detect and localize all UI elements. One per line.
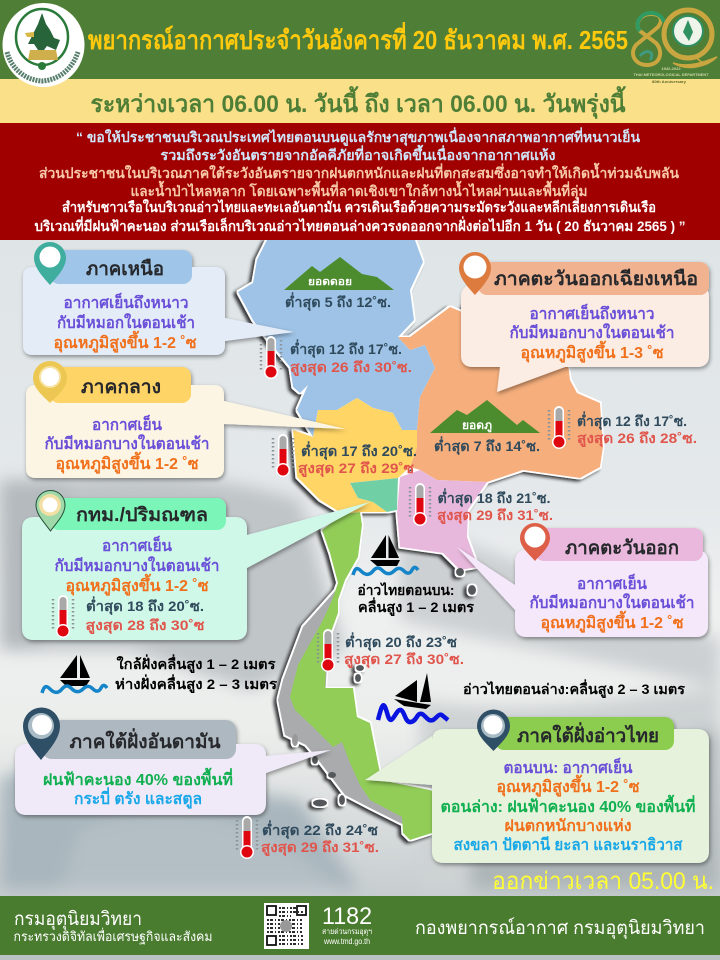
warning panel: [0, 123, 720, 240]
issue time: ออกข่าวเวลา 05.00 น.: [492, 868, 714, 895]
region: northeast: [398, 300, 603, 482]
time range band: ระหว่างเวลา 06.00 น. วันนี้ ถึง เวลา 06.00 น. วันพรุ่งนี้: [90, 85, 627, 120]
department name: กรมอุตุนิยมวิทยา: [14, 909, 142, 931]
temperatures: north: สูงสุด 26 ถึง 30˚ซ.: [290, 359, 412, 376]
logo: 80th anniversary: THAI METEOROLOGICAL DEPARTMENT: [634, 72, 709, 77]
description: [43, 767, 233, 810]
Andaman coast grey land: [278, 590, 405, 824]
temperatures: north: [261, 336, 412, 379]
description: ฝนฟ้าคะนอง 40% ของพื้นที่: [43, 767, 233, 789]
heading: ภาคตะวันออก: [565, 538, 679, 559]
map of Thailand: [238, 240, 603, 840]
panel: north: [23, 242, 294, 355]
description: อากาศเย็นถึงหนาว: [64, 291, 189, 312]
heading: ภาคใต้ฝั่งอ่าวไทย: [517, 722, 659, 747]
logo: department seal: [2, 3, 84, 87]
pin: [459, 252, 491, 295]
logo: 80th anniversary: 80th Anniversary: [652, 79, 687, 84]
warning panel: “ ขอให้ประชาชนบริเวณประเทศไทยตอนบนดูแลรักษาสุขภาพเนื่องจากสภาพอากาศที่หนาวเย็น: [76, 127, 640, 146]
pin: [33, 361, 67, 403]
sea note: Andaman: [115, 654, 278, 693]
description: อุณหภูมิสูงขึ้น 1-2 ˚ซ: [56, 451, 199, 475]
panel: central: [26, 361, 346, 478]
temperatures: south upper: ต่ำสุด 20 ถึง 23˚ซ: [345, 632, 458, 651]
panel: east: [457, 523, 708, 637]
department name: [14, 909, 212, 945]
temperatures: สูงสุด 28 ถึง 30˚ซ: [86, 617, 205, 634]
warning panel: สำหรับชาวเรือในบริเวณอ่าวไทยและทะเลอันดามัน ควรเดินเรือด้วยความระมัดระวังและหลีกเลี่ยงการเดินเรือ: [62, 197, 656, 215]
description: อุณหภูมิสูงขึ้น 1-2 ˚ซ: [540, 610, 684, 634]
description: อุณหภูมิสูงขึ้น 1-3 ˚ซ: [520, 340, 664, 364]
temperatures: [53, 595, 205, 638]
description: กับมีหมอกบางในตอนเช้า: [54, 556, 220, 575]
description: อุณหภูมิสูงขึ้น 1-2 ˚ซ: [496, 774, 640, 798]
temperatures: central: [273, 434, 417, 477]
sea note: upper gulf: คลื่นสูง 1 – 2 เมตร: [358, 597, 474, 616]
mountain: doi peak: [284, 257, 394, 311]
title: พยากรณ์อากาศประจำวันอังคารที่ 20 ธันวาคม พ.ศ. 2565: [88, 21, 628, 55]
footer band: [0, 896, 720, 955]
panel: Bangkok and vicinity: [22, 490, 370, 640]
panel: northeast: [459, 252, 709, 392]
panel: south Gulf of Thailand coast: [365, 710, 709, 863]
description: [440, 756, 696, 854]
pin: [477, 710, 510, 751]
description: ตอนบน: อากาศเย็น: [504, 756, 633, 777]
sea note: upper gulf: อ่าวไทยตอนบน:: [358, 581, 454, 598]
region: north: [238, 240, 435, 437]
region: central: [293, 398, 417, 514]
description: [44, 413, 210, 475]
description: อุณหภูมิสูงขึ้น 1-2 ˚ซ: [54, 330, 197, 354]
description: กับมีหมอกบางในตอนเช้า: [510, 323, 674, 342]
description: กับมีหมอกในตอนเช้า: [57, 313, 195, 332]
description: สงขลา ปัตตานี ยะลา และนราธิวาส: [454, 835, 683, 854]
description: อากาศเย็น: [577, 572, 647, 593]
time range band: [0, 79, 720, 123]
description: อากาศเย็นถึงหนาว: [530, 302, 655, 323]
heading: กทม./ปริมณฑล: [76, 505, 208, 526]
temperatures: south lower: [237, 816, 379, 859]
description: กับมีหมอกบางในตอนเช้า: [44, 434, 210, 453]
warning panel: และน้ำป่าไหลหลาก โดยเฉพาะพื้นที่ลาดเชิงเขาใกล้ทางน้ำไหลผ่านและพื้นที่ลุ่ม: [130, 180, 588, 200]
description: ตอนล่าง: ฝนฟ้าคะนอง 40% ของพื้นที่: [440, 794, 696, 816]
warning panel: รวมถึงระวังอันตรายจากอัคคีภัยที่อาจเกิดขึ้นเนื่องจากอากาศแห้ง: [160, 144, 556, 163]
sea note: upper gulf: [358, 581, 474, 616]
icon: boat, Andaman: [42, 655, 107, 693]
description: กับมีหมอกบางในตอนเช้า: [530, 593, 694, 612]
sea note: Andaman: ห่างฝั่งคลื่นสูง 2 – 3 เมตร: [115, 674, 278, 693]
description: [510, 302, 674, 364]
heading: ภาคใต้ฝั่งอันดามัน: [70, 728, 221, 753]
region: east: [397, 470, 487, 570]
heading: ภาคกลาง: [81, 377, 161, 398]
temperatures: east: ต่ำสุด 18 ถึง 21˚ซ.: [438, 488, 550, 507]
hotline: [322, 903, 372, 946]
temperatures: south lower: ต่ำสุด 22 ถึง 24˚ซ: [262, 820, 379, 839]
region: south: [290, 512, 450, 840]
heading: ภาคเหนือ: [86, 258, 164, 280]
temperatures: south upper: [318, 629, 464, 672]
department name: กระทรวงดิจิทัลเพื่อเศรษฐกิจและสังคม: [14, 928, 212, 945]
QR code: [264, 903, 309, 949]
description: [54, 291, 197, 354]
sea note: lower gulf: อ่าวไทยตอนล่าง:คลื่นสูง 2 – 3 เมตร: [463, 679, 685, 698]
temperatures: south upper: สูงสุด 27 ถึง 30˚ซ.: [344, 651, 464, 668]
logo: 80th anniversary: [633, 10, 717, 84]
warning panel: ส่วนประชาชนในบริเวณภาคใต้ระวังอันตรายจากฝนตกหนักและฝนที่ตกสะสมซึ่งอาจทำให้เกิดน้ำท่วมฉับพลัน: [39, 162, 679, 181]
region: Bangkok and vicinity: [350, 478, 398, 512]
panel: south Andaman coast: [15, 708, 331, 815]
mountain: doi peak: ต่ำสุด 5 ถึง 12˚ซ.: [285, 292, 391, 311]
temperatures: northeast: [549, 406, 697, 449]
background: misty mountains: [0, 240, 720, 960]
mountain: phu peak: ต่ำสุด 7 ถึง 14˚ซ.: [434, 436, 540, 455]
description: อากาศเย็น: [102, 534, 172, 555]
temperatures: ต่ำสุด 18 ถึง 20˚ซ.: [86, 596, 204, 615]
description: [54, 534, 220, 597]
forecast bureau: กองพยากรณ์อากาศ กรมอุตุนิยมวิทยา: [415, 917, 705, 940]
description: อากาศเย็น: [92, 413, 162, 434]
pin: [23, 708, 60, 760]
description: อุณหภูมิสูงขึ้น 1-2 ˚ซ: [66, 573, 209, 597]
logo: 80th anniversary: 1942-2022: [661, 66, 681, 71]
temperatures: east: [410, 483, 553, 526]
heading: ภาคตะวันออกเฉียงเหนือ: [494, 268, 698, 290]
islands: [292, 568, 476, 806]
mountain: phu peak: [430, 400, 540, 455]
top banner: [0, 0, 720, 80]
temperatures: northeast: ต่ำสุด 12 ถึง 17˚ซ.: [577, 411, 687, 430]
temperatures: central: ต่ำสุด 17 ถึง 20˚ซ.: [301, 441, 417, 460]
pin: [36, 490, 65, 531]
hotline: www.tmd.go.th: [323, 937, 370, 946]
pin: [520, 523, 550, 561]
sea note: Andaman: ใกล้ฝั่งคลื่นสูง 1 – 2 เมตร: [116, 654, 276, 673]
temperatures: south lower: สูงสุด 29 ถึง 31˚ซ.: [261, 839, 379, 856]
temperatures: central: สูงสุด 27 ถึง 29˚ซ: [298, 460, 415, 477]
description: ฝนตกหนักบางแห่ง: [504, 817, 632, 835]
temperatures: east: สูงสุด 29 ถึง 31˚ซ.: [437, 507, 553, 524]
description: กระบี่ ตรัง และสตูล: [74, 787, 202, 810]
hotline: สายด่วนกรมอุตุฯ: [322, 927, 372, 936]
warning panel: บริเวณที่มีฝนฟ้าคะนอง ส่วนเรือเล็กบริเวณอ่าวไทยตอนล่างควรงดออกจากฝั่งต่อไปอีก 1 วัน ( 20 ธันวาคม 2565 ) ”: [34, 216, 686, 234]
temperatures: north: ต่ำสุด 12 ถึง 17˚ซ.: [290, 339, 402, 358]
description: [530, 572, 694, 634]
mountain: phu peak: ยอดภู: [462, 420, 492, 433]
mountain: doi peak: ยอดดอย: [308, 277, 352, 288]
temperatures: northeast: สูงสุด 26 ถึง 28˚ซ.: [577, 430, 697, 447]
pin: [34, 242, 66, 285]
hotline: 1182: [322, 903, 372, 930]
icon: boat, lower gulf: [378, 673, 448, 722]
icon: boat, upper gulf: [353, 535, 418, 575]
